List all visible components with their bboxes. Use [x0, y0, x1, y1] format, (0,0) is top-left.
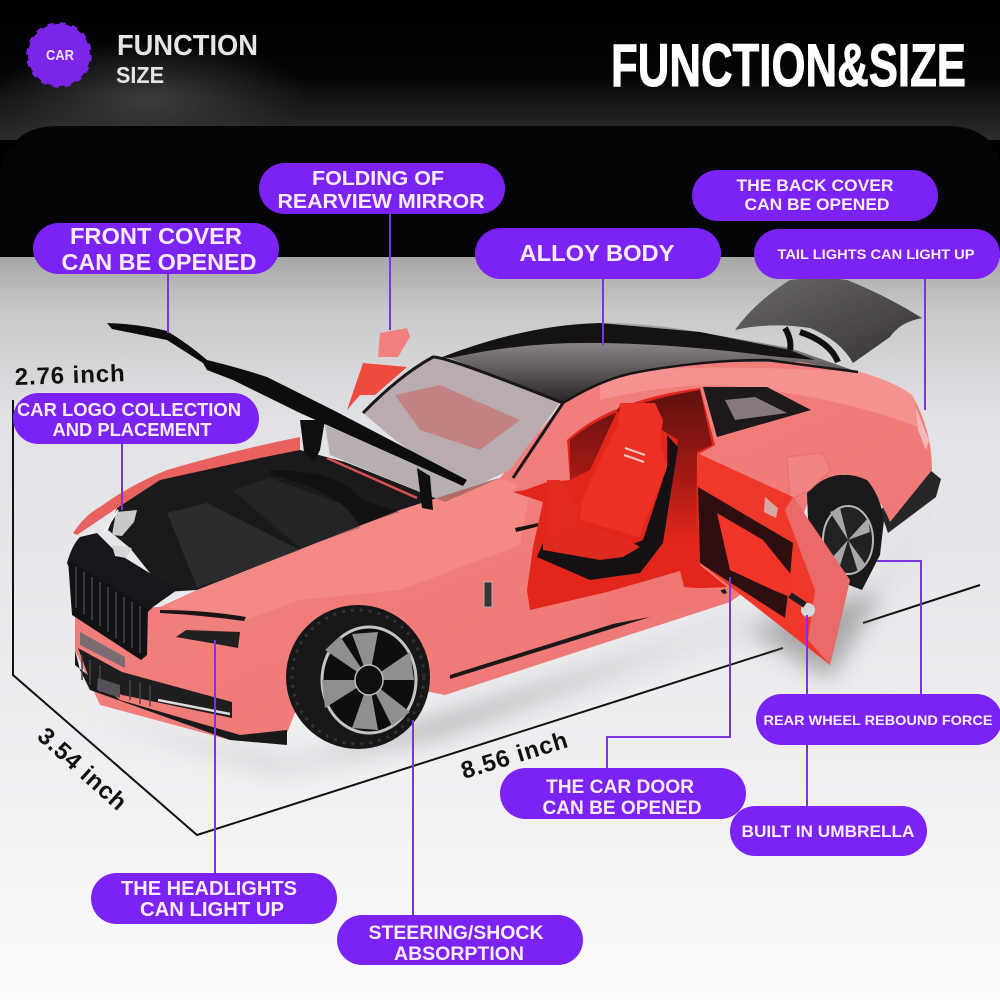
- engine bay: [108, 450, 500, 592]
- dimension: height: 2.76 inch: [14, 360, 125, 391]
- far fender: [73, 437, 300, 535]
- badge: car: [28, 24, 90, 86]
- label: umbrella: BUILT IN UMBRELLA: [742, 823, 915, 841]
- badge: car: CAR: [46, 48, 74, 64]
- label: alloy body: [475, 228, 721, 279]
- label: back cover: [692, 170, 938, 221]
- lower windshield: [325, 425, 500, 502]
- car shadow: [90, 500, 930, 770]
- open door: [697, 453, 850, 665]
- dimension lines: [13, 400, 980, 835]
- header background: [0, 0, 1000, 140]
- side emblem: [484, 582, 492, 607]
- door sill: [607, 571, 730, 625]
- windshield: [363, 357, 560, 490]
- label: alloy body: ALLOY BODY: [520, 240, 675, 266]
- label: car logo: [13, 393, 259, 444]
- label: front cover: CAN BE OPENED: [62, 249, 256, 275]
- rear wheel: [807, 475, 884, 590]
- seat: [537, 403, 678, 580]
- near side fender sheen: [165, 478, 530, 620]
- grille: [68, 560, 148, 660]
- front bumper: [75, 632, 287, 745]
- label: car door: THE CAR DOOR: [546, 777, 694, 798]
- car: [67, 278, 941, 749]
- label: tail lights: [754, 229, 1000, 279]
- header label: [116, 30, 258, 88]
- label: rear wheel: REAR WHEEL REBOUND FORCE: [764, 712, 992, 728]
- label: umbrella: [730, 806, 927, 856]
- label: steering: [337, 915, 583, 965]
- rear fuel flap: [787, 453, 831, 500]
- header glow: [0, 40, 310, 160]
- dimension: depth: 3.54 inch: [32, 722, 132, 816]
- hood strut left: [300, 420, 325, 462]
- label: steering: ABSORPTION: [394, 944, 524, 965]
- label: back cover: THE BACK COVER: [736, 177, 894, 195]
- label: back cover: CAN BE OPENED: [744, 196, 890, 214]
- door handle: [515, 522, 544, 532]
- label: headlights: CAN LIGHT UP: [140, 899, 284, 921]
- label: folding mirror: FOLDING OF: [312, 168, 444, 190]
- nose cowl: [67, 533, 177, 612]
- header label: FUNCTION: [117, 30, 258, 62]
- label: car door: CAN BE OPENED: [542, 798, 702, 819]
- far side mirror and door: [347, 328, 410, 410]
- studio floor: [0, 257, 1000, 1000]
- steering wheel: [547, 480, 580, 540]
- pink body: [75, 362, 932, 740]
- header label: SIZE: [116, 62, 164, 88]
- headlight strip: [160, 610, 246, 621]
- roof edge line: [563, 360, 858, 403]
- label: headlights: THE HEADLIGHTS: [121, 878, 297, 900]
- rear bumper: [880, 470, 941, 533]
- roof black band: [430, 323, 815, 362]
- quarter window: [703, 387, 811, 437]
- side sill line: [450, 589, 727, 679]
- interior: [513, 388, 730, 625]
- label: car door: [500, 768, 746, 819]
- hood strut right: [417, 468, 433, 510]
- label: car logo: AND PLACEMENT: [52, 420, 212, 440]
- label: folding mirror: [259, 163, 505, 214]
- label: rear wheel: [756, 694, 1000, 745]
- tail light: [916, 408, 929, 450]
- roof: [430, 323, 858, 403]
- hood ornament: [104, 510, 137, 558]
- front wheel: [286, 605, 430, 749]
- label: car logo: CAR LOGO COLLECTION: [17, 400, 241, 420]
- hood open panel: [107, 323, 467, 510]
- label: steering: STEERING/SHOCK: [368, 923, 544, 944]
- dimension: length: 8.56 inch: [458, 727, 571, 785]
- rear deck highlight: [600, 368, 925, 430]
- windshield frame: [363, 357, 563, 478]
- trunk lid: [735, 278, 922, 363]
- label: front cover: [33, 223, 279, 275]
- windshield interior reflection: [395, 385, 520, 450]
- leader lines: [122, 214, 925, 915]
- headlight: [176, 630, 240, 648]
- label: headlights: [91, 873, 337, 924]
- label: tail lights: TAIL LIGHTS CAN LIGHT UP: [778, 246, 974, 262]
- label: folding mirror: REARVIEW MIRROR: [278, 191, 485, 213]
- label: front cover: FRONT COVER: [70, 223, 242, 249]
- dark backdrop panel: [0, 126, 1000, 270]
